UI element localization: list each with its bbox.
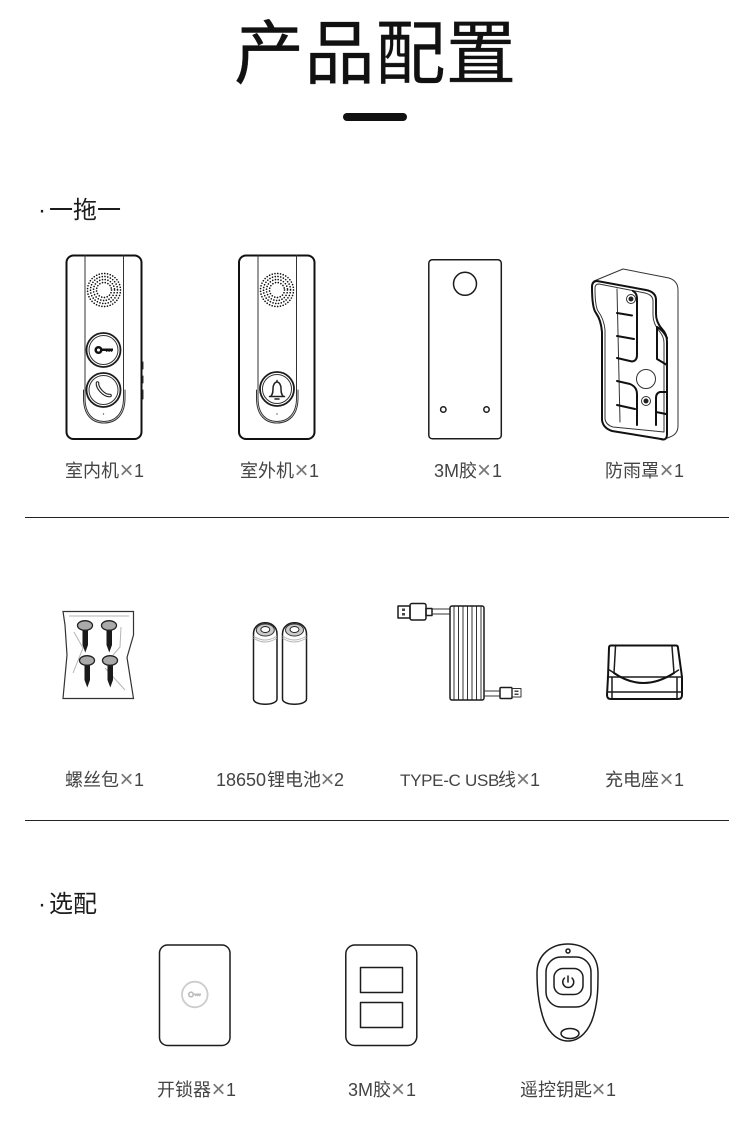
label: remote key fob: × bbox=[592, 1076, 606, 1103]
label: batteries: 18650 bbox=[216, 770, 266, 790]
heading: bundled items: 一拖一 bbox=[49, 197, 121, 224]
icon: 3M adhesive bbox=[429, 260, 501, 439]
label: rain cover: 1 bbox=[674, 461, 684, 481]
divider bbox=[25, 516, 729, 518]
label: rain cover: × bbox=[660, 457, 674, 484]
icon: indoor unit bbox=[66, 256, 143, 439]
label: 3M adhesive: 胶 bbox=[459, 461, 477, 481]
icon: 3M adhesive for opener bbox=[346, 945, 417, 1046]
label: 3M adhesive: 1 bbox=[492, 461, 502, 481]
heading: optional items: · bbox=[38, 891, 46, 918]
label: rain cover: 防雨罩 bbox=[605, 461, 659, 481]
label: 3M adhesive: × bbox=[477, 457, 491, 484]
label: screw pack: 1 bbox=[134, 770, 144, 790]
label: door opener: × bbox=[212, 1076, 226, 1103]
icon: screw pack bbox=[63, 612, 134, 698]
icon: charging base bbox=[607, 646, 682, 699]
label: door opener: 开锁器 bbox=[157, 1080, 211, 1100]
label: batteries: 锂电池 bbox=[267, 770, 321, 790]
label: 3M adhesive for opener: × bbox=[391, 1076, 405, 1103]
label: outdoor unit: 室外机 bbox=[240, 461, 294, 481]
label: charging base: 充电座 bbox=[605, 770, 659, 790]
icon: outdoor unit bbox=[239, 256, 314, 439]
label: outdoor unit: 1 bbox=[309, 461, 319, 481]
label: 3M adhesive for opener: 1 bbox=[406, 1080, 416, 1100]
title accent bar bbox=[343, 113, 407, 121]
label: 3M adhesive for opener: 胶 bbox=[373, 1080, 391, 1100]
icon: batteries bbox=[254, 623, 306, 704]
label: remote key fob: 遥控钥匙 bbox=[520, 1080, 592, 1100]
label: screw pack: 螺丝包 bbox=[65, 770, 119, 790]
label: indoor unit: 室内机 bbox=[65, 461, 119, 481]
label: USB cable: 线 bbox=[498, 770, 516, 790]
label: outdoor unit: × bbox=[294, 457, 309, 484]
label: USB cable: TYPE-C USB bbox=[400, 771, 499, 790]
icon: USB cable bbox=[398, 604, 521, 700]
heading: optional items: 选配 bbox=[49, 891, 97, 918]
label: remote key fob: 1 bbox=[606, 1080, 616, 1100]
icon: rain cover bbox=[592, 269, 678, 440]
icon: remote key fob bbox=[537, 944, 598, 1041]
label: USB cable: 1 bbox=[530, 770, 540, 790]
label: door opener: 1 bbox=[226, 1080, 236, 1100]
divider bbox=[25, 820, 729, 822]
icon: door opener bbox=[160, 945, 230, 1046]
label: indoor unit: 1 bbox=[134, 461, 144, 481]
label: charging base: × bbox=[660, 766, 674, 793]
label: charging base: 1 bbox=[674, 770, 684, 790]
label: batteries: 2 bbox=[334, 770, 344, 790]
heading: bundled items: · bbox=[38, 197, 46, 224]
label: batteries: × bbox=[320, 766, 335, 793]
label: indoor unit: × bbox=[120, 457, 134, 484]
label: 3M adhesive for opener: 3M bbox=[348, 1080, 373, 1100]
label: screw pack: × bbox=[120, 766, 134, 793]
title: 产品配置 bbox=[234, 15, 516, 93]
label: USB cable: × bbox=[516, 766, 530, 793]
label: 3M adhesive: 3M bbox=[434, 461, 459, 481]
